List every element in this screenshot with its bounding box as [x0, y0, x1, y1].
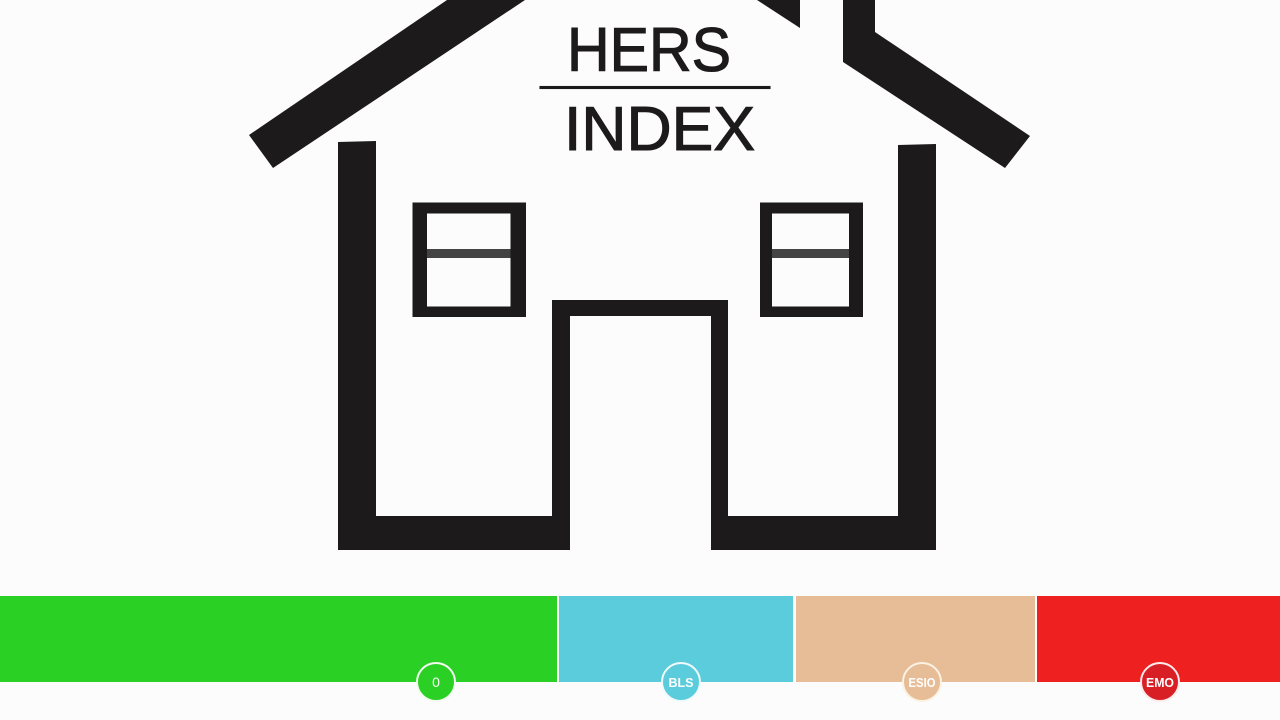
house walls and door outline: [338, 141, 936, 550]
segment: red: [1037, 596, 1280, 682]
title divider: [540, 86, 770, 88]
roof: right slope and chimney: [843, 0, 1030, 168]
right window: [760, 202, 863, 317]
marker: tan: [903, 663, 941, 701]
title word: INDEX: INDEX: [564, 95, 755, 164]
segment: blue: [559, 596, 793, 682]
title: HERS Index: [540, 16, 770, 164]
marker: green: [417, 663, 455, 701]
house illustration: [249, 0, 1030, 550]
marker: blue: BLS: [668, 675, 694, 690]
marker: blue: [662, 663, 700, 701]
roof: left slope: [249, 0, 525, 168]
marker: green: 0: [432, 674, 440, 690]
segment: tan: [796, 596, 1035, 682]
marker: red: EMO: [1146, 675, 1174, 690]
rating scale bar: [0, 596, 1280, 682]
title word: HERS: HERS: [567, 16, 731, 85]
segment: green: [0, 596, 557, 682]
marker: tan: ESIO: [908, 675, 936, 690]
left window: [412, 202, 526, 317]
marker: red: [1141, 663, 1179, 701]
roof: right slope fragment: [757, 0, 800, 28]
